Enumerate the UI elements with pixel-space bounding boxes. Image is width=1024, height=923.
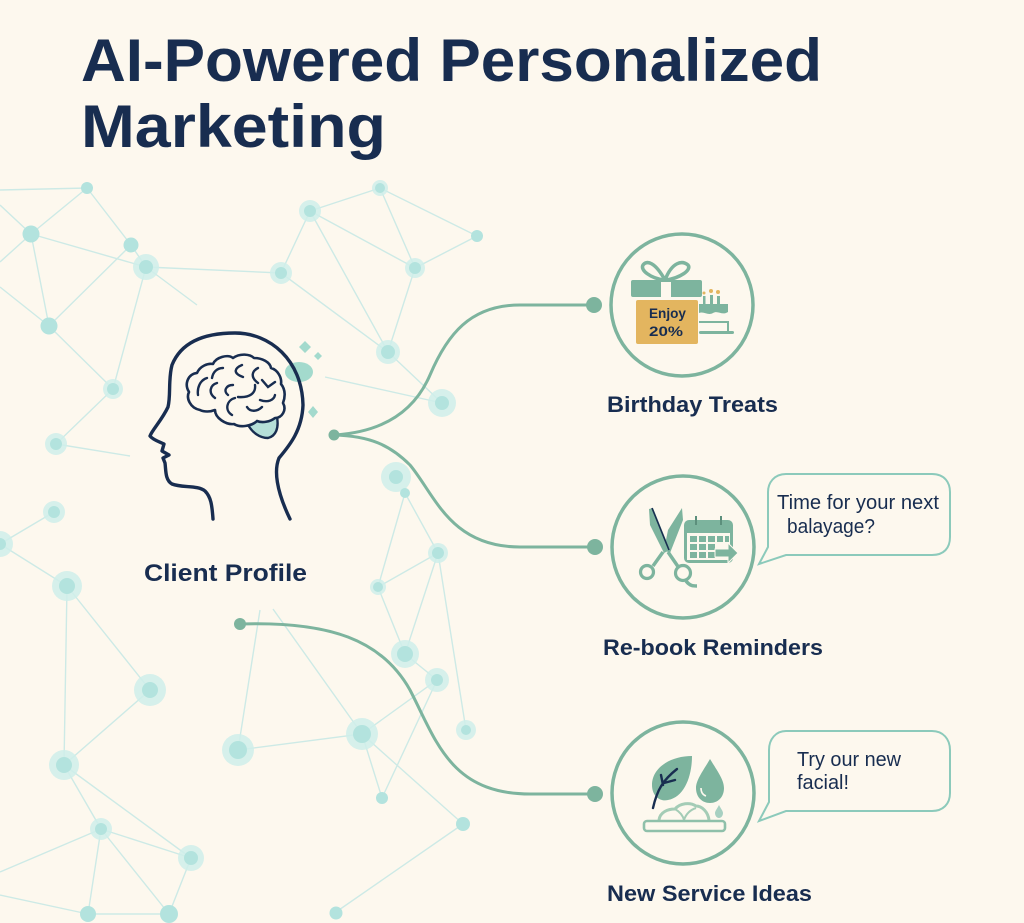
label: new service ideas: New Service Ideas [607, 881, 812, 906]
label: re-book reminders: Re-book Reminders [603, 635, 823, 660]
title: AI-Powered Personalized [81, 27, 822, 94]
callout: new facial: Try our new [797, 749, 902, 771]
title [81, 27, 822, 160]
connector curves [234, 297, 603, 802]
callout: balayage reminder [759, 474, 950, 564]
callout: new facial [759, 731, 950, 821]
icon: birthday treats: 20% [649, 323, 684, 339]
icon: new service ideas [612, 722, 754, 864]
label: birthday treats: Birthday Treats [607, 392, 778, 417]
callout: new facial: facial! [797, 772, 849, 794]
title: Marketing [81, 93, 386, 160]
icon: re-book reminders [612, 476, 754, 618]
icon: birthday treats [611, 234, 753, 376]
icon: head with brain [150, 333, 322, 519]
label: client profile: Client Profile [144, 560, 307, 587]
callout: balayage reminder: balayage? [787, 516, 875, 538]
callout: balayage reminder: Time for your next [777, 492, 939, 514]
icon: birthday treats: Enjoy [649, 305, 686, 321]
background neural network [0, 180, 483, 923]
